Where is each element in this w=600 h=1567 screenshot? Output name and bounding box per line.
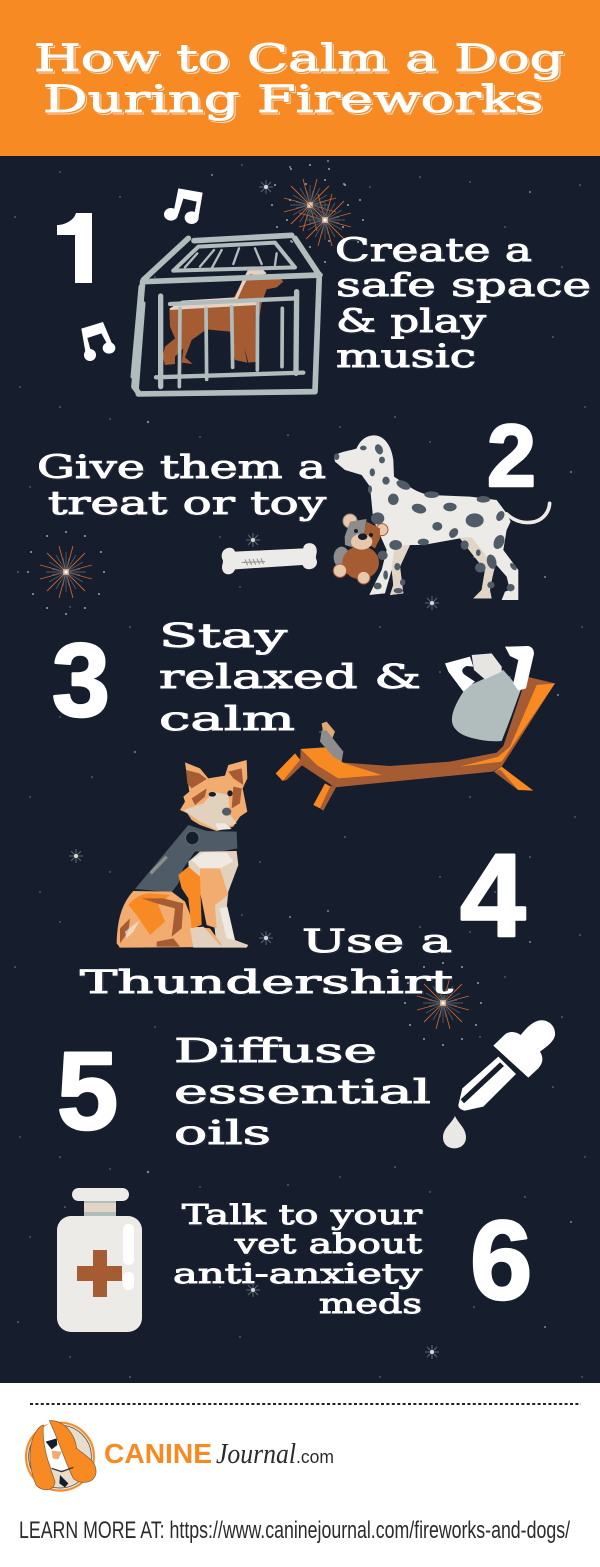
number 1 (57, 213, 92, 283)
drop (443, 1116, 466, 1148)
sparkles (69, 180, 439, 1359)
dropper bulb (493, 1020, 555, 1078)
step 3 text (159, 616, 421, 738)
star field (0, 157, 600, 1383)
number 5: 5 (57, 1030, 118, 1153)
shirt tag (151, 857, 167, 873)
step 4 text: Use a (302, 922, 452, 960)
title (34, 37, 564, 121)
icon: crate with dog and music notes (81, 188, 320, 394)
step 1 text: & play (336, 302, 486, 340)
step 6 text: anti-anxiety (173, 1259, 423, 1290)
person feet (322, 722, 335, 740)
step 5 text: oils (174, 1113, 271, 1152)
lounger highlights (301, 683, 555, 778)
logo wordmark: .com (296, 1447, 334, 1467)
step 2 text: treat or toy (48, 484, 326, 522)
number 1: 1 (56, 194, 111, 304)
icon: bone (222, 543, 317, 574)
step 1 text: safe space (336, 266, 591, 304)
dog ears (30, 1425, 55, 1490)
step 3 text: calm (159, 699, 295, 738)
number 4: 4 (460, 830, 526, 962)
step 2 text (37, 448, 326, 522)
step 3 text: Stay (159, 616, 288, 655)
title: During Fireworks (43, 78, 543, 121)
cross (77, 1250, 122, 1297)
logo wordmark: CANINE (104, 1438, 212, 1469)
step 5 text (174, 1031, 431, 1152)
illustration: collie in Thundershirt (117, 760, 248, 948)
chest (188, 851, 248, 948)
header band (0, 0, 600, 156)
firework: left of bone (27, 531, 105, 615)
head (180, 760, 247, 831)
title: How to Calm a Dog (34, 37, 564, 80)
dalmatian spots (334, 443, 518, 593)
illustration: dalmatian, teddy and bone (222, 435, 550, 600)
paws (190, 927, 247, 948)
step 1 text: music (336, 337, 476, 375)
collar (52, 1467, 73, 1472)
firework: top pair (271, 164, 364, 263)
step 6 text: vet about (234, 1229, 422, 1260)
eyes and nose (209, 790, 233, 797)
lounger seat (300, 677, 555, 787)
step 6 text: Talk to your (182, 1200, 422, 1231)
step 5 text: Diffuse (174, 1031, 377, 1070)
lounger back legs (494, 767, 533, 791)
step 2 text: Give them a (37, 448, 326, 486)
icon: music note upper (164, 188, 203, 224)
leg shade (200, 868, 228, 928)
crate frame (133, 235, 320, 394)
muzzle (183, 792, 237, 830)
icon: teddy bear (333, 514, 388, 584)
ears and face markings (186, 768, 243, 808)
dalmatian tail (507, 503, 550, 523)
person arms (445, 657, 475, 692)
dog silhouette (163, 269, 283, 365)
step 1 text: Create a (335, 231, 532, 269)
step 4 text: Thundershirt (80, 963, 453, 1001)
step 6 text (173, 1200, 423, 1320)
firework: by Thundershirt (404, 962, 482, 1046)
person torso (452, 670, 521, 741)
step 6 text: meds (319, 1289, 422, 1320)
footer panel (0, 1383, 600, 1567)
dalmatian body (334, 435, 518, 600)
icon: music note lower (81, 322, 115, 361)
icon: medicine bottle (57, 1188, 142, 1332)
haunch (117, 891, 223, 948)
dog head (40, 1420, 72, 1470)
person head (472, 653, 502, 679)
step 4 text (80, 922, 453, 1001)
dalmatian shaded legs (390, 537, 495, 598)
number 3: 3 (52, 623, 110, 739)
icon: dropper (443, 1020, 555, 1148)
dropper tube (458, 1057, 516, 1111)
logo wordmark (104, 1438, 334, 1470)
shirt button (186, 831, 199, 845)
illustration: person on lounger (276, 646, 555, 811)
number 6: 6 (470, 1198, 532, 1323)
step 5 text: essential (174, 1072, 431, 1111)
front leg orange (178, 867, 202, 928)
dog highlight (170, 267, 267, 310)
number 2: 2 (487, 406, 536, 505)
thundershirt (135, 825, 237, 892)
step 1 text (335, 231, 591, 375)
logo wordmark: Journal (216, 1439, 296, 1470)
front leg (219, 907, 235, 940)
step 3 text: relaxed & (159, 657, 421, 696)
logo: basset hound badge (26, 1420, 96, 1491)
